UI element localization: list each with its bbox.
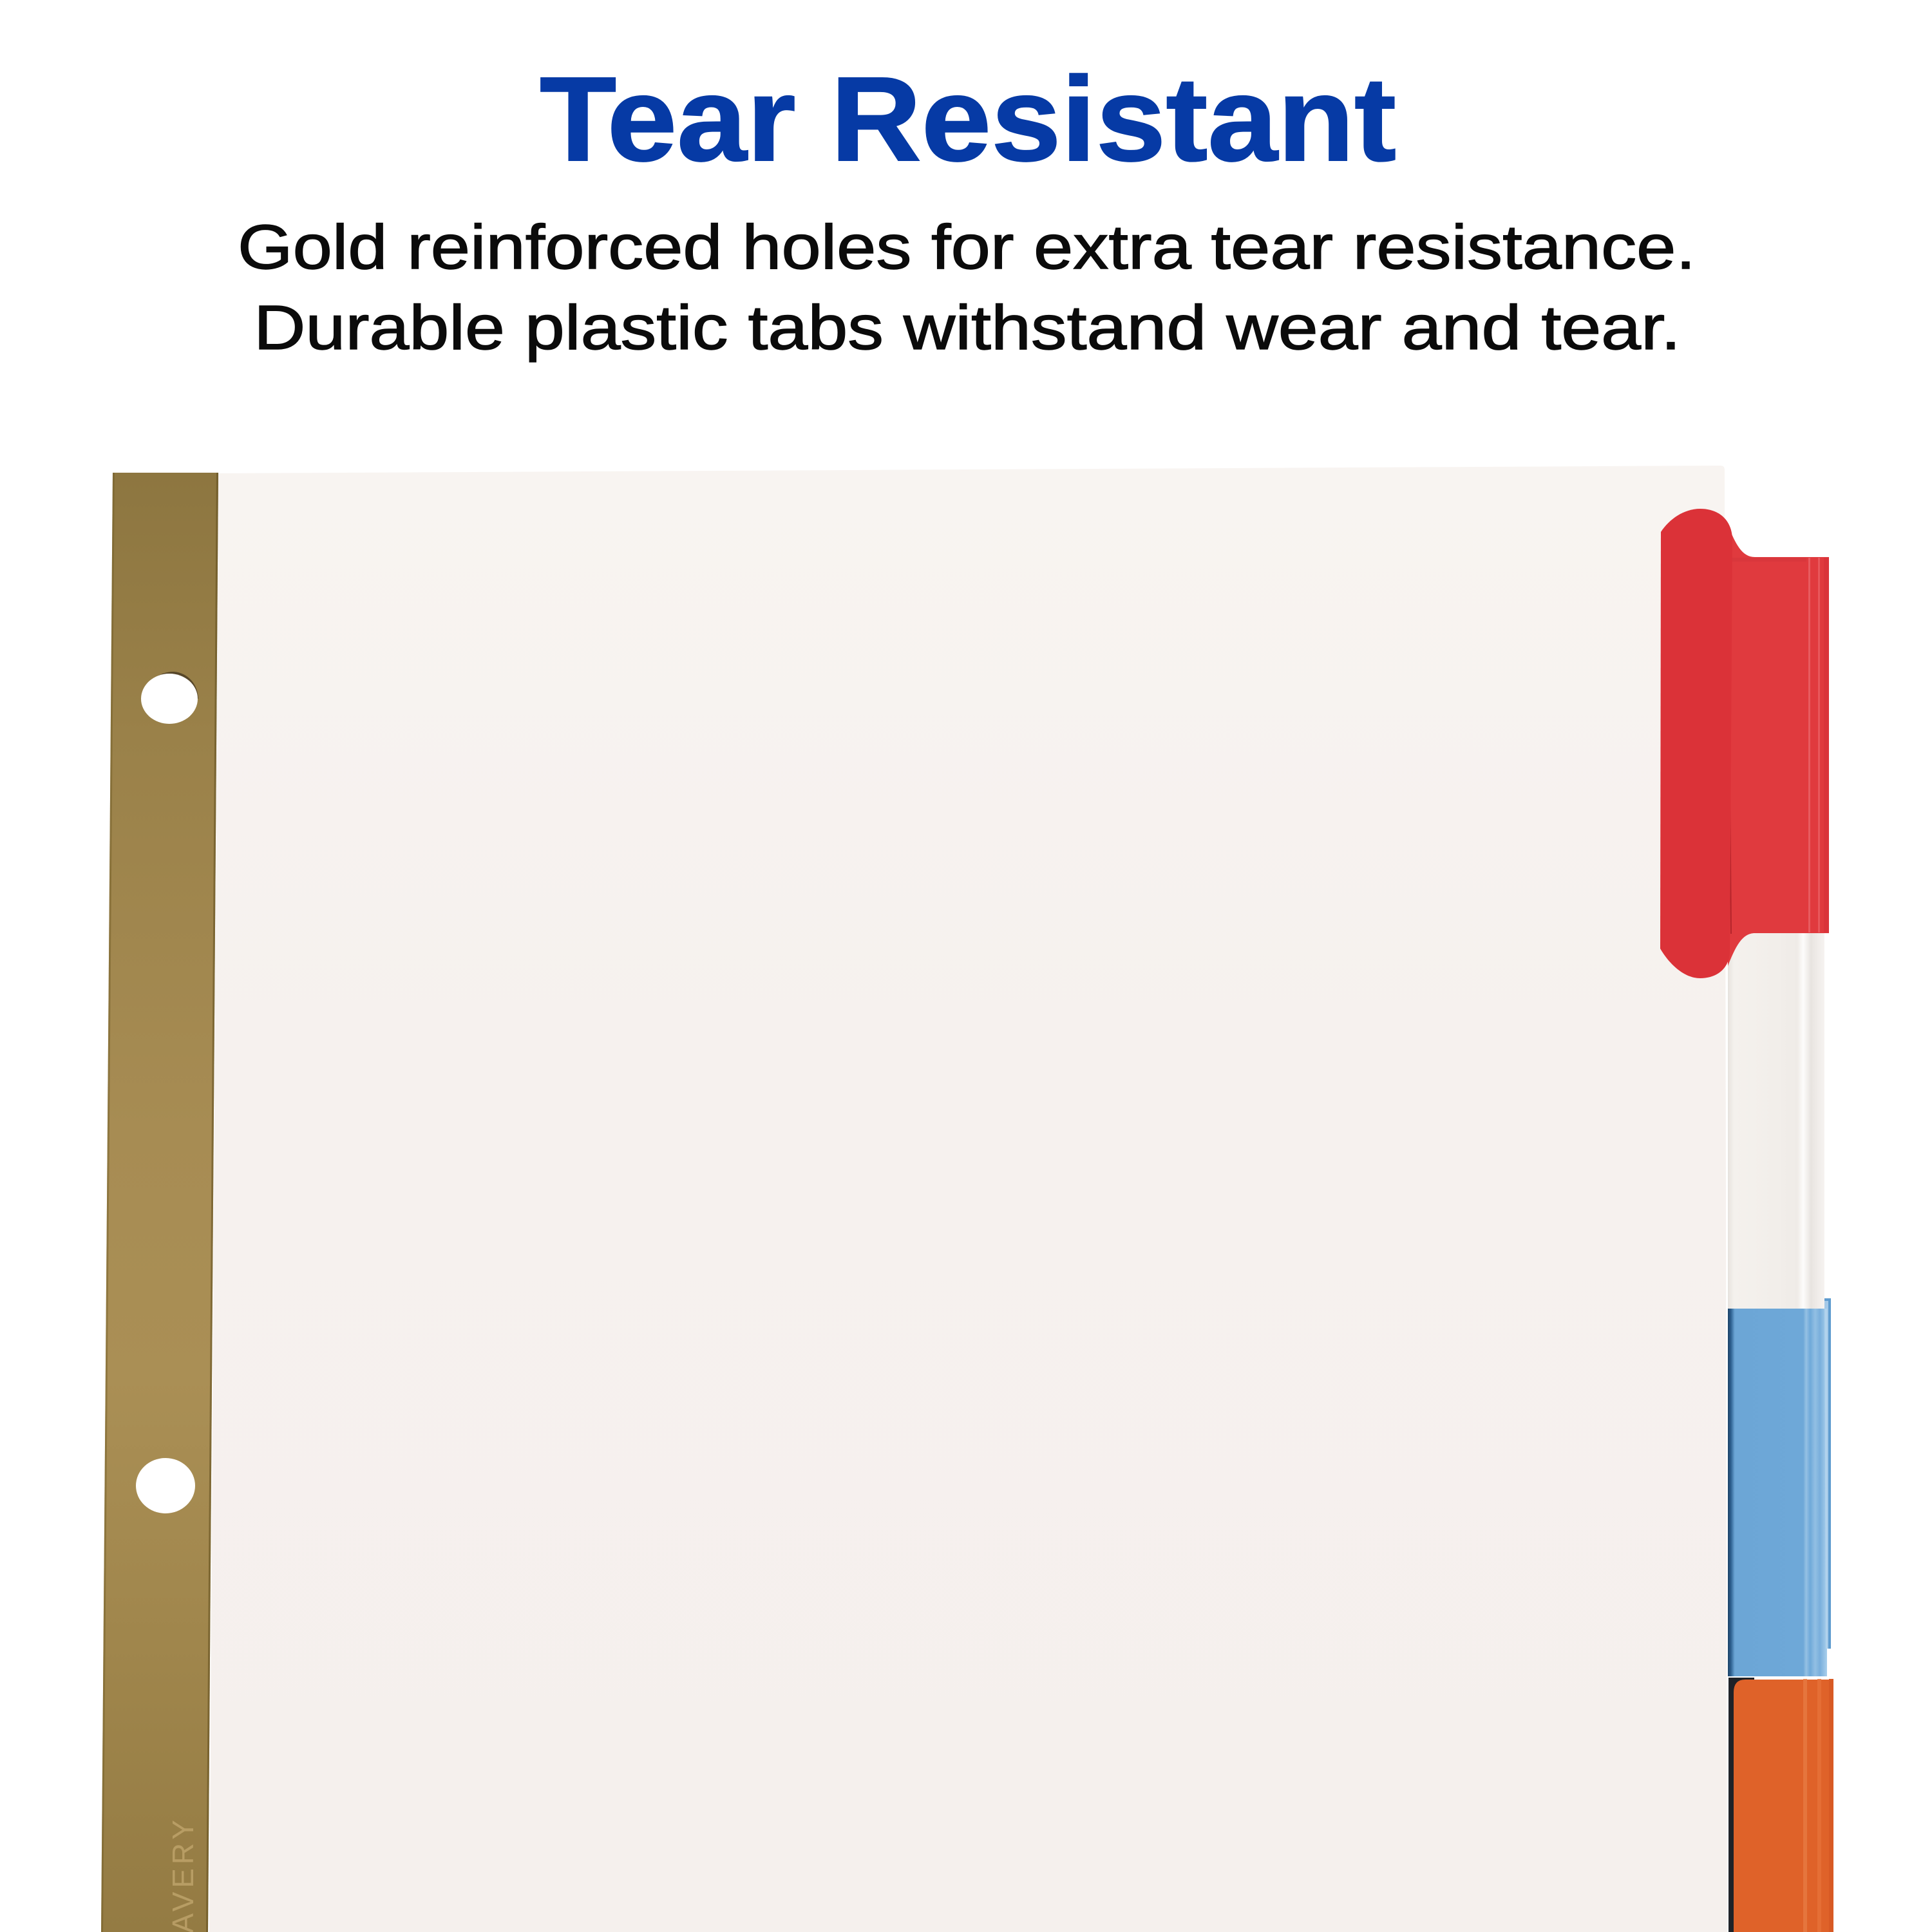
gold reinforced strip xyxy=(101,473,218,1932)
red tab fold line xyxy=(1728,567,1731,934)
subtitle text block xyxy=(238,212,1696,363)
embossed brand text: AVERY xyxy=(166,1816,200,1932)
subtitle line 2: Durable plastic tabs withstand wear and tear. xyxy=(254,292,1681,363)
red tab xyxy=(1728,525,1829,966)
red tab front flap xyxy=(1660,509,1732,978)
blue tab xyxy=(1728,1298,1831,1676)
subtitle line 1: Gold reinforced holes for extra tear resistance. xyxy=(238,212,1696,282)
tabs group xyxy=(1728,525,1833,1932)
paper sheet xyxy=(209,466,1727,1932)
white tab xyxy=(1728,933,1824,1309)
hole 1 xyxy=(141,672,198,724)
hole 2 xyxy=(136,1458,195,1513)
orange tab xyxy=(1728,1678,1833,1932)
title: Tear Resistant xyxy=(540,53,1396,186)
